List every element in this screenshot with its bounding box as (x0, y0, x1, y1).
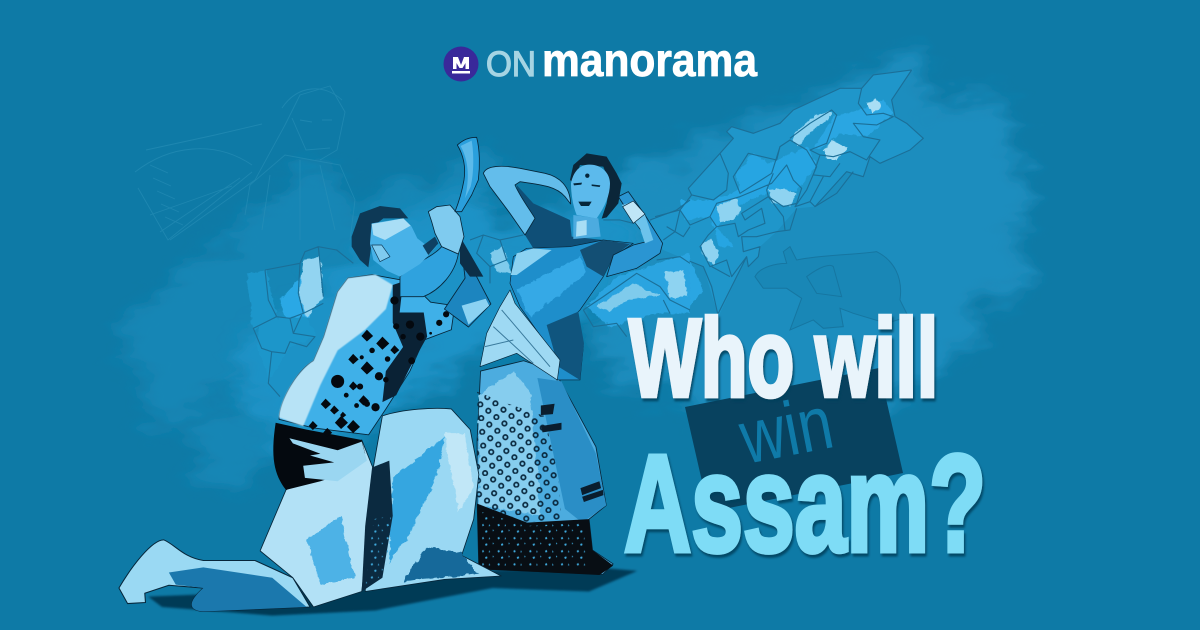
bangle (623, 201, 645, 223)
patterned centre fold (362, 461, 393, 591)
rhino sketch (755, 247, 908, 330)
map of Assam: upper districts (633, 70, 923, 317)
man lower body and torso (119, 249, 501, 611)
figure: dancing woman (477, 153, 663, 575)
central bright patches (490, 247, 690, 327)
figure: kneeling man blowing horn (119, 137, 501, 611)
back leg and foot (119, 540, 310, 611)
horn (455, 137, 479, 212)
shirt motifs (309, 296, 453, 437)
tag background (685, 368, 903, 512)
torso (279, 275, 455, 435)
neck light (576, 220, 587, 237)
line art: woman with basket (135, 86, 355, 240)
hair (570, 153, 622, 219)
skirt hem (477, 504, 613, 575)
woman upper body (480, 153, 663, 380)
neck (573, 215, 601, 239)
hands (428, 205, 464, 254)
skirt (477, 361, 613, 574)
face (370, 218, 437, 277)
far arm light (462, 299, 489, 325)
map of Assam: central band east of the woman (470, 200, 690, 337)
fold light (365, 516, 391, 585)
torso light patch (279, 275, 393, 426)
dark stripes (541, 404, 604, 502)
far cuff (460, 237, 483, 277)
hair (352, 206, 408, 267)
headline: Who will: Who will (629, 297, 938, 420)
tag word: win (732, 380, 840, 481)
western bright patches (247, 257, 323, 380)
facial features (573, 173, 600, 206)
waist cloth (273, 423, 365, 490)
sash folds (485, 310, 550, 367)
sari highlights (517, 257, 587, 317)
skirt light (479, 371, 541, 516)
sari right dark (580, 240, 630, 277)
brush wash: behind lower map (275, 230, 660, 430)
man upper body (352, 137, 483, 297)
western district lines (253, 247, 353, 397)
far arm (444, 249, 491, 327)
logo mark (444, 46, 478, 82)
woman lower body (477, 361, 613, 575)
headline: Assam?: Assam? (624, 427, 986, 581)
headband (372, 218, 411, 240)
skirt right shade (537, 378, 606, 523)
hem speckle (482, 512, 589, 567)
waist cloth highlights (289, 438, 367, 481)
sash (480, 290, 560, 380)
drape shading (307, 433, 479, 585)
shirt dark band (382, 282, 427, 402)
raised left arm (483, 166, 571, 235)
ear (372, 245, 390, 262)
bright district patches (633, 100, 893, 307)
arm highlight (622, 202, 653, 243)
logo (444, 34, 757, 86)
back thigh cloth (260, 440, 376, 607)
skirt motifs (477, 392, 561, 523)
near forearm (400, 247, 458, 297)
chest light (511, 248, 552, 275)
map base (640, 70, 923, 317)
front drape (365, 408, 501, 591)
under-arm and shoulder shade (517, 185, 603, 248)
sari chest (510, 240, 633, 380)
leg shading (169, 567, 307, 611)
face (571, 165, 610, 218)
brush wash: left (150, 180, 480, 450)
central district lines (470, 200, 690, 337)
brush wash: right (640, 95, 985, 430)
lower torso dark (547, 312, 584, 380)
raised right arm (607, 192, 663, 277)
win tag (685, 368, 903, 512)
horn highlight (461, 141, 473, 198)
map of Assam: lower districts west of the man (247, 247, 353, 397)
logo wordmark: manorama: manorama (542, 34, 757, 86)
district outlines (655, 70, 923, 317)
mouthpiece (423, 237, 438, 255)
pale district patches (635, 98, 882, 308)
ground shadow (148, 567, 637, 616)
logo wordmark: ON: ON (486, 45, 536, 84)
